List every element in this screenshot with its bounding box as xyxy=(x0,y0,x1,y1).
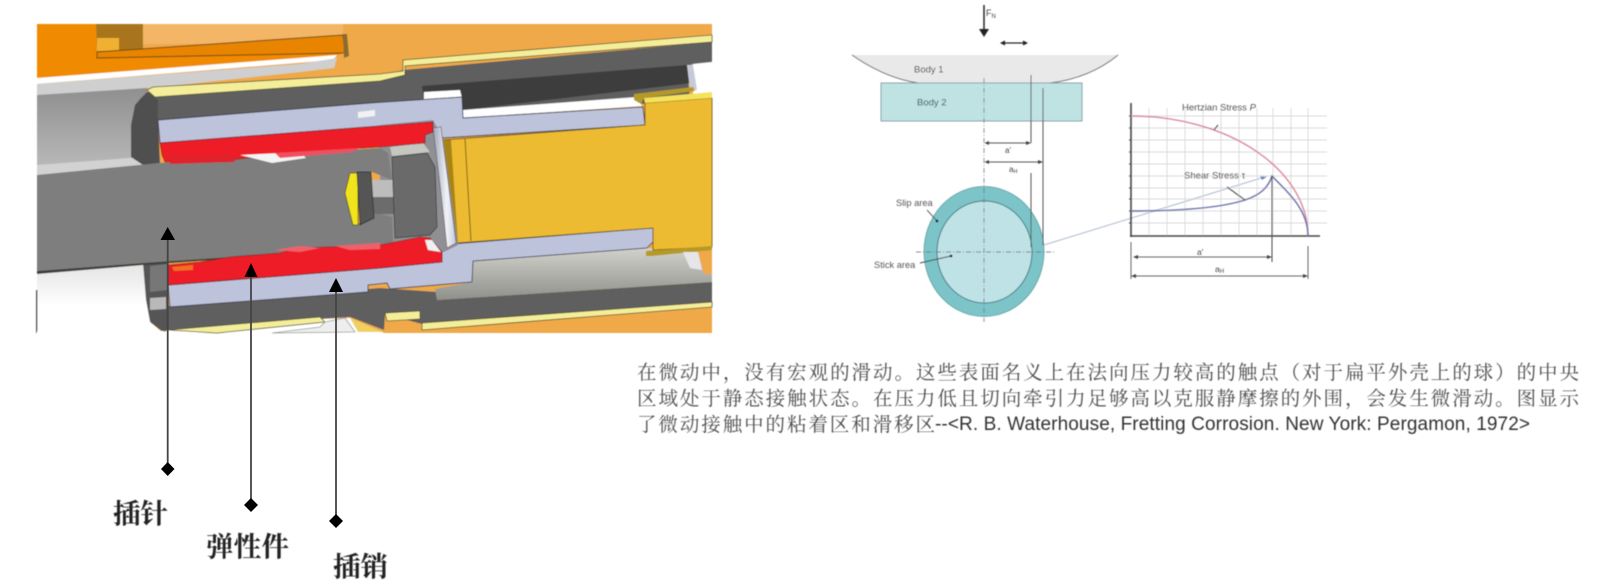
chart: stress distribution xyxy=(1129,102,1327,279)
body 1: Body 1 xyxy=(914,64,944,76)
arrow: socket pointer xyxy=(329,278,343,528)
curved lens washer xyxy=(433,127,456,248)
white cavity upper right xyxy=(693,62,712,98)
main grey pin xyxy=(37,148,394,274)
contact dimension lines: a xyxy=(1009,165,1013,174)
bottom shell details xyxy=(272,318,383,333)
white and grey upper strip xyxy=(37,55,337,175)
white lower-left area xyxy=(37,264,163,333)
red spring upper xyxy=(160,122,433,164)
Hertzian stress label xyxy=(1182,102,1257,130)
socket cavity backing xyxy=(380,120,458,252)
connector line to chart xyxy=(1044,176,1267,245)
arrow: pin pointer xyxy=(160,227,175,476)
stick area label: Stick area xyxy=(874,260,916,270)
red spring lower xyxy=(168,237,442,285)
slip and stick circles xyxy=(924,186,1044,316)
panel: connector cross-section xyxy=(36,24,712,582)
text block: fretting description xyxy=(637,361,1579,436)
text block: fretting description: 了微动接触中的粘着区和滑移区 xyxy=(637,414,935,436)
shear stress curve xyxy=(1131,176,1308,236)
normal force arrow: N xyxy=(992,14,996,20)
centre lines xyxy=(916,78,1055,322)
chart dimensions: H xyxy=(1220,269,1224,275)
chart dimensions: a' xyxy=(1197,247,1204,257)
blue-grey socket xyxy=(158,97,653,307)
normal force arrow: F xyxy=(986,8,992,18)
label: pin: 插针 xyxy=(113,498,168,529)
normal force arrow xyxy=(979,5,996,37)
motion double arrow xyxy=(1000,40,1028,46)
contact dimension lines xyxy=(984,75,1043,247)
axes xyxy=(1129,103,1320,237)
pin tip details xyxy=(345,143,437,238)
grid xyxy=(1131,108,1327,236)
text block: fretting description: 在微动中，没有宏观的滑动。这些表面名义上在法向压力较高的触点（对于扁平外壳上的球）的中央 xyxy=(637,361,1579,384)
slip area label: Slip area xyxy=(896,198,934,208)
label: socket: 插销 xyxy=(333,551,388,582)
grey cylinder lower right xyxy=(435,248,712,300)
arrow: spring pointer xyxy=(244,263,258,512)
text block: fretting description: 区域处于静态接触状态。在压力低且切向牵引力足够高以克服静摩擦的外围，会发生微滑动。图显示 xyxy=(637,387,1579,410)
shear stress label: Shear Stress τ xyxy=(1184,170,1246,182)
chart dimensions: a xyxy=(1215,264,1220,274)
dark housing xyxy=(131,42,712,332)
body 2 xyxy=(881,83,1082,121)
Hertzian stress label: Hertzian Stress P xyxy=(1182,102,1257,114)
contact dimension lines: H xyxy=(1013,169,1017,175)
body 1 xyxy=(852,55,1118,83)
shear stress label xyxy=(1184,170,1246,200)
slip area label xyxy=(896,198,938,222)
orange outer shell xyxy=(37,24,712,333)
Hertzian stress curve xyxy=(1131,116,1308,236)
label: spring: 弹性件 xyxy=(206,531,289,562)
body 2: Body 2 xyxy=(917,98,947,108)
stick area label xyxy=(874,255,952,270)
gold insulator xyxy=(443,87,712,270)
contact dimension lines: a' xyxy=(1005,146,1011,155)
panel: contact diagram xyxy=(852,5,1267,322)
text block: fretting description: --<R. B. Waterhouse, Fretting Corrosion. New York: Pergamon, 1972> xyxy=(935,414,1530,435)
white bottom edge under shell xyxy=(163,318,384,333)
chart dimensions xyxy=(1131,176,1308,279)
yellow stripes xyxy=(147,35,712,333)
